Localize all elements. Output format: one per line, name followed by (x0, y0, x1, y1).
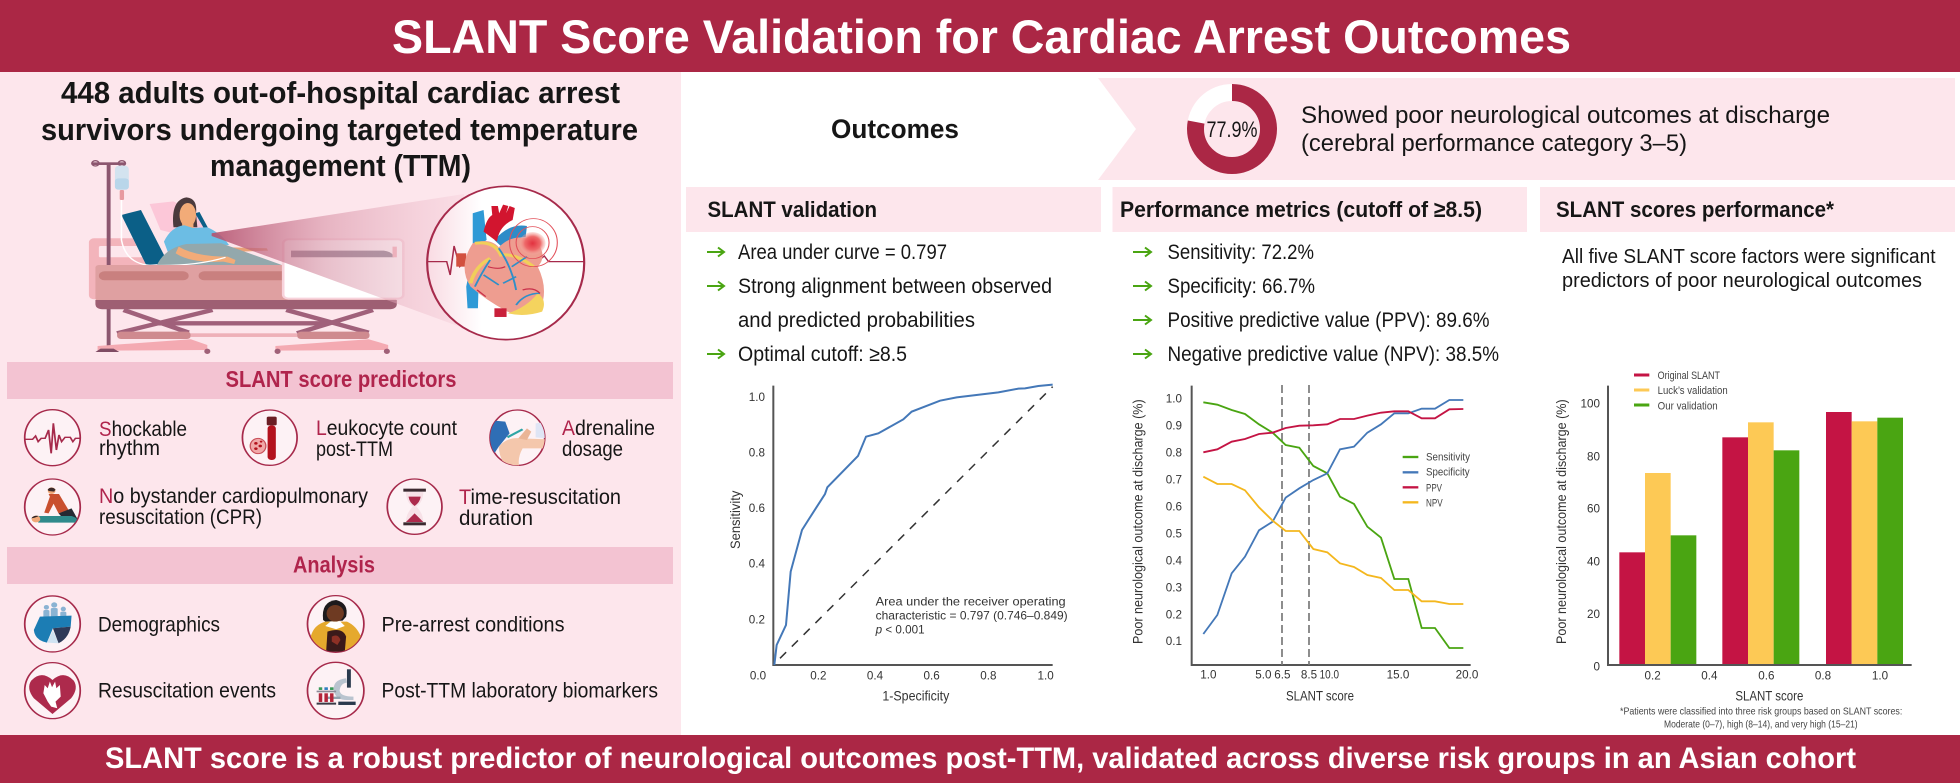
conclusion banner: SLANT score is a robust predictor of neurological outcomes post-TTM, validated across diverse risk groups in an Asian cohort (105, 742, 1856, 775)
text block: SLANT validation bullets: Area under curve = 0.797 (738, 241, 947, 264)
heading: outcomes: Outcomes (831, 114, 959, 144)
panel heading: performance metrics: Performance metrics (cutoff of ≥8.5) (1120, 197, 1482, 222)
text block: SLANT score factors (1562, 246, 1936, 292)
heading: study population: survivors undergoing targeted temperature (41, 112, 638, 147)
chart: performance by SLANT score line chart: 0.3 (1166, 581, 1182, 594)
icon: resuscitation events (25, 663, 80, 719)
text block: SLANT validation bullets: and predicted probabilities (738, 309, 975, 332)
text: shockable rhythm: Shockable (99, 418, 187, 441)
chart: performance by SLANT score line chart (1130, 385, 1479, 704)
text block: SLANT score factors: All five SLANT score factors were significant (1562, 246, 1936, 268)
chart: ROC curve: 0.4 (867, 669, 884, 682)
chart: SLANT score risk groups bar chart: 100 (1581, 398, 1601, 411)
text block: SLANT score factors: predictors of poor neurological outcomes (1562, 270, 1922, 292)
text: demographics: Demographics (98, 614, 220, 636)
chart: performance by SLANT score line chart: 1.0 (1166, 393, 1183, 406)
text: time-resuscitation duration: Time-resuscitation (459, 486, 621, 509)
icon: pre-arrest conditions (307, 596, 364, 652)
chart: performance by SLANT score line chart: 10.0 (1320, 668, 1339, 681)
heading: study population (41, 75, 638, 183)
text: adrenaline dosage: Adrenaline (562, 417, 655, 440)
icon: post-TTM laboratory biomarkers (307, 662, 364, 719)
chart: SLANT score risk groups bar chart: 20 (1587, 608, 1601, 621)
chart: performance by SLANT score line chart: 0.5 (1166, 527, 1182, 540)
text block: performance metrics bullets: Sensitivity: 72.2% (1168, 241, 1314, 264)
text: time-resuscitation duration: duration (459, 507, 533, 530)
text block: SLANT validation bullets: Strong alignment between observed (738, 275, 1052, 298)
line: NPV (1203, 477, 1463, 604)
text: resuscitation events: Resuscitation events (98, 680, 276, 702)
panel heading: performance metrics (1112, 187, 1527, 232)
heading: study population: management (TTM) (210, 148, 471, 183)
text block: SLANT validation bullets: Optimal cutoff: ≥8.5 (738, 343, 907, 366)
text: adrenaline dosage (562, 417, 655, 461)
chart: ROC curve: 1-Specificity (882, 688, 949, 704)
chart: performance by SLANT score line chart: 0.1 (1166, 635, 1182, 648)
callout: 77.9% poor neurological outcomes: (cerebral performance category 3–5) (1301, 130, 1687, 157)
chart: SLANT score risk groups bar chart: 0.4 (1701, 669, 1718, 682)
text block: performance metrics bullets (1133, 241, 1499, 366)
chart: performance by SLANT score line chart: 0.6 (1166, 500, 1182, 513)
legend: Luck’s validation (1658, 385, 1728, 397)
chart: ROC curve: 1.0 (1038, 669, 1054, 682)
text block: performance metrics bullets: Specificity: 66.7% (1168, 275, 1315, 298)
legend: Sensitivity (1426, 451, 1470, 463)
chart: ROC curve: 0.2 (749, 613, 765, 626)
text block: performance metrics bullets: Negative predictive value (NPV): 38.5% (1168, 343, 1499, 366)
text: no bystander CPR (99, 485, 368, 529)
panel: study population and predictors (0, 72, 681, 735)
chart: ROC curve: 1.0 (749, 391, 766, 404)
icon: demographics (25, 596, 80, 652)
text: adrenaline dosage: dosage (562, 438, 623, 461)
legend (1403, 451, 1470, 510)
chart: performance by SLANT score line chart: Poor neurological outcome at discharge (%) (1130, 399, 1146, 644)
chart: SLANT score risk groups bar chart: 40 (1587, 555, 1601, 568)
band heading: SLANT score predictors (7, 362, 673, 399)
footnote (1620, 706, 1902, 731)
line: PPV (1203, 409, 1463, 452)
bars: moderate group (1619, 473, 1696, 665)
text: post-TTM laboratory biomarkers: Post-TTM laboratory biomarkers (382, 680, 658, 702)
icon: leukocyte tube (242, 410, 297, 465)
chart: performance by SLANT score line chart: 0.9 (1166, 420, 1182, 433)
illustration: patient in hospital bed with magnified heart (89, 161, 585, 354)
panel heading: SLANT scores performance: SLANT scores performance* (1556, 197, 1834, 222)
callout: 77.9% poor neurological outcomes: Showed poor neurological outcomes at discharge (1301, 102, 1830, 129)
text: shockable rhythm (99, 418, 187, 460)
panel heading: SLANT validation (686, 187, 1101, 232)
text: leukocyte count: Leukocyte count (316, 417, 457, 440)
chart: SLANT score risk groups bar chart: 80 (1587, 450, 1601, 463)
text block: performance metrics bullets: Positive predictive value (PPV): 89.6% (1168, 309, 1490, 332)
chart: performance by SLANT score line chart: 0.2 (1166, 608, 1182, 621)
chart: SLANT score risk groups bar chart: 0.8 (1815, 669, 1831, 682)
line: specificity (1203, 400, 1463, 634)
callout: 77.9% poor neurological outcomes (1098, 78, 1955, 180)
chart: SLANT score risk groups bar chart: 1.0 (1872, 669, 1889, 682)
text: leukocyte count (316, 417, 457, 461)
legend: Specificity (1426, 467, 1470, 479)
chart: ROC curve: 0.0 (750, 669, 767, 682)
chart: SLANT score risk groups bar chart: 0 (1594, 660, 1601, 673)
bars: high group (1722, 422, 1799, 665)
chart: ROC curve: Area under the receiver operating (876, 596, 1066, 609)
icon: adrenaline injection (489, 409, 546, 466)
text block: SLANT validation bullets (707, 241, 1052, 366)
chart: ROC curve: p < 0.001 (875, 623, 925, 636)
title banner (0, 0, 1960, 72)
chart: SLANT score risk groups bar chart: 0.2 (1645, 669, 1661, 682)
chart: ROC curve: 0.8 (749, 447, 765, 460)
text: leukocyte count: post-TTM (316, 438, 393, 461)
chart: SLANT score risk groups bar chart: 60 (1587, 503, 1601, 516)
band heading: analysis (7, 547, 673, 584)
chart: ROC curve: characteristic = 0.797 (0.746–0.849) (876, 609, 1068, 622)
legend: Our validation (1658, 401, 1718, 413)
chart: ROC curve: 0.4 (749, 558, 766, 571)
conclusion banner (0, 735, 1960, 783)
chart: performance by SLANT score line chart: SLANT score (1286, 688, 1354, 704)
legend: PPV (1426, 482, 1442, 494)
panel heading: SLANT validation: SLANT validation (708, 197, 877, 222)
chart: performance by SLANT score line chart: 20.0 (1456, 668, 1479, 681)
legend: Original SLANT (1658, 370, 1720, 382)
bars: very high group (1826, 412, 1903, 665)
chart: SLANT score risk groups bar chart: 0.6 (1758, 669, 1774, 682)
chart: performance by SLANT score line chart: 8.5 (1301, 668, 1317, 681)
chart: performance by SLANT score line chart: 0.8 (1166, 447, 1182, 460)
band heading: analysis: Analysis (293, 552, 375, 578)
donut chart: 77.9% (1196, 92, 1268, 166)
text: no bystander CPR: No bystander cardiopulmonary (99, 485, 368, 508)
footnote: *Patients were classified into three risk groups based on SLANT scores: (1620, 706, 1902, 717)
legend (1634, 370, 1728, 413)
chart: performance by SLANT score line chart: 0.4 (1166, 554, 1183, 567)
chart: performance by SLANT score line chart: 6.5 (1274, 668, 1290, 681)
heading: study population: 448 adults out-of-hospital cardiac arrest (61, 75, 620, 110)
donut chart: 77.9%: 77.9% (1206, 117, 1258, 142)
chart: performance by SLANT score line chart: 1.0 (1200, 668, 1217, 681)
chart: ROC curve: 0.6 (924, 669, 940, 682)
legend: NPV (1426, 498, 1443, 510)
panel heading: SLANT scores performance (1540, 187, 1955, 232)
band heading: SLANT score predictors: SLANT score predictors (226, 366, 456, 392)
chart: SLANT score risk groups bar chart: Poor neurological outcome at discharge (%) (1553, 399, 1569, 644)
icon: shockable rhythm (25, 410, 80, 466)
chart: ROC curve: 0.8 (980, 669, 996, 682)
chart: ROC curve: 0.2 (810, 669, 826, 682)
text: shockable rhythm: rhythm (99, 437, 160, 460)
text: pre-arrest conditions: Pre-arrest conditions (382, 614, 564, 636)
icon: hourglass (387, 479, 442, 534)
chart: performance by SLANT score line chart: 5.0 (1255, 668, 1272, 681)
chart: SLANT score risk groups bar chart (1553, 370, 1912, 731)
chart: ROC curve: Sensitivity (727, 491, 743, 549)
chart: ROC curve (727, 385, 1068, 704)
chart: performance by SLANT score line chart: 15.0 (1387, 668, 1410, 681)
title banner: SLANT Score Validation for Cardiac Arrest Outcomes (392, 10, 1571, 63)
chart: SLANT score risk groups bar chart: SLANT score (1735, 688, 1804, 704)
text: time-resuscitation duration (459, 486, 621, 530)
text: no bystander CPR: resuscitation (CPR) (99, 506, 262, 529)
footnote: Moderate (0–7), high (8–14), and very high (15–21) (1664, 720, 1858, 731)
line: sensitivity (1203, 402, 1463, 648)
chart: ROC curve: 0.6 (749, 502, 765, 515)
chart: performance by SLANT score line chart: 0.7 (1166, 474, 1182, 487)
icon: bystander CPR (25, 479, 80, 535)
